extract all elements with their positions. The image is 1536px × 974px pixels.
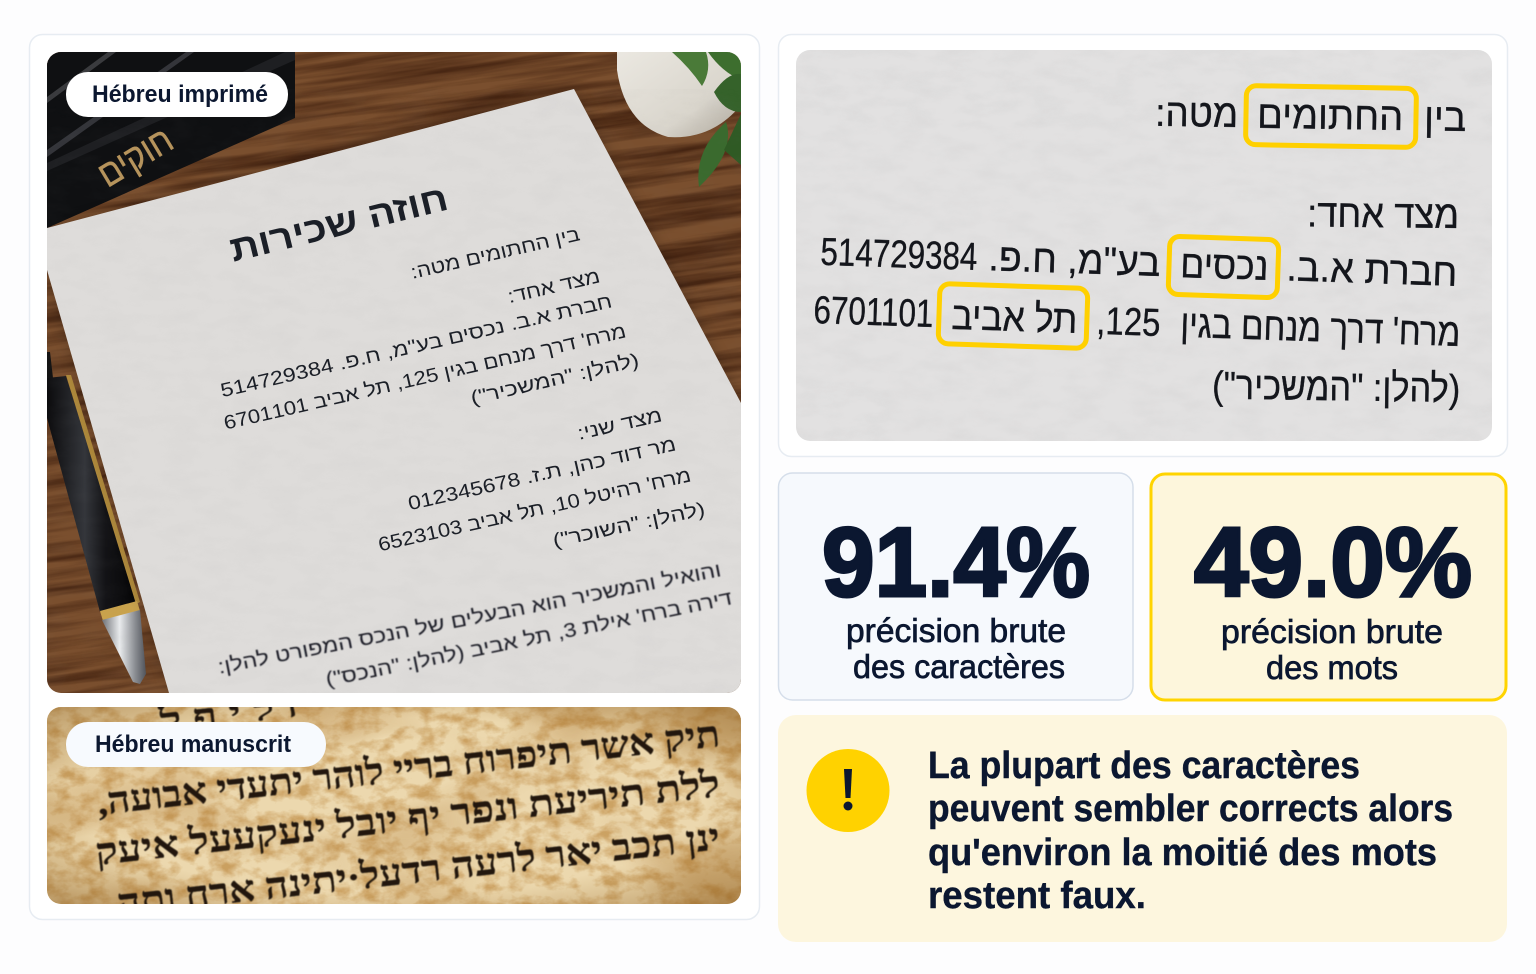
close-up Hebrew text lines [813, 92, 1467, 411]
contract text lines: (להלן: "השוכר") [551, 498, 707, 552]
label: Hébreu manuscrit: Hébreu manuscrit [95, 731, 291, 758]
close-up Hebrew text lines: 6701101 [813, 289, 934, 336]
label: Hébreu imprimé [66, 72, 288, 117]
contract text lines: מרח' רהיטל 10, תל אביב 6523103 [376, 464, 693, 556]
close-up Hebrew text lines: החתומים [1257, 94, 1404, 139]
callout text: La plupart des caractères [928, 745, 1360, 787]
manuscript text lines: תיק אשר תיפרוח בריי לוהר יתעדי אבועה, [95, 714, 722, 824]
photo: handwritten Hebrew on parchment [47, 707, 741, 904]
metric caption: des caractères [853, 648, 1065, 685]
callout text [928, 745, 1453, 917]
contract text lines: בין החתומים מטה: [409, 223, 582, 284]
icon: law book: חוקים [90, 119, 180, 195]
contract text lines [216, 177, 734, 691]
close-up Hebrew text lines: (להלן: "המשכיר") [1212, 365, 1460, 411]
contract text lines: דירה ברח' אילת 3, תל אביב (להלן: "הנכס") [324, 587, 734, 691]
contract text lines: מרח' דרך מנחם בגין 125, תל אביב 6701101 [222, 320, 628, 435]
highlight: word box 3 [938, 284, 1088, 348]
close-up Hebrew text lines: 514729384 [820, 231, 978, 279]
label: Hébreu imprimé: Hébreu imprimé [92, 81, 268, 108]
icon: warning exclamation [806, 749, 890, 832]
contract text lines: מצד אחד: [506, 265, 602, 308]
callout text: qu'environ la moitié des mots [928, 832, 1437, 874]
icon: ballpoint pen [47, 352, 146, 684]
icon: white cup and plant [617, 52, 741, 187]
close-up Hebrew text lines: מצד אחד: [1307, 192, 1459, 237]
contract text lines: מר דוד כהן, ת.ז. 012345678 [406, 433, 678, 515]
metric caption: précision brute [1221, 613, 1443, 650]
metric caption [1221, 613, 1443, 686]
highlight: word box 1 [1245, 86, 1416, 147]
close-up Hebrew text lines: חברת א.ב. [1286, 246, 1458, 295]
contract text lines: והואיל והמשכיר הוא הבעלים של הנכס המפורט להלן: [216, 559, 723, 679]
card: word accuracy [1151, 474, 1506, 700]
metric caption: des mots [1266, 649, 1398, 686]
contract text lines: חברת א.ב. נכסים בע"מ, ח.פ. 514729384 [218, 290, 614, 402]
label: Hébreu manuscrit [66, 722, 326, 767]
card: character accuracy [778, 473, 1133, 700]
close-up Hebrew text lines: מרח' דרך מנחם בגין [1180, 303, 1461, 355]
manuscript text lines: ינן תכב יאר לרעה רדעל·יתינה ארח ותה [115, 817, 722, 924]
callout text: peuvent sembler corrects alors [928, 788, 1453, 830]
contract text lines: מצד שני: [575, 404, 664, 445]
photo: zoomed paper with Hebrew text [796, 50, 1492, 441]
panel: OCR close-up [778, 34, 1508, 456]
manuscript text lines: ללת תיריעת ונפר יף יובל ינעקעעל איעק [93, 764, 722, 874]
photo: printed Hebrew contract on wooden desk [47, 52, 741, 693]
close-up Hebrew text lines: בין [1424, 96, 1467, 140]
metric: 49.0%: 49.0% [1194, 507, 1472, 617]
close-up Hebrew text lines: 125, [1096, 300, 1161, 345]
panel: examples of Hebrew documents [30, 34, 760, 920]
contract text lines: (להלן: "המשכיר") [469, 349, 641, 410]
close-up Hebrew text lines: מטה: [1155, 92, 1239, 136]
manuscript text lines: ז ל י ף ל [156, 687, 301, 738]
printed contract sheet [47, 89, 741, 693]
manuscript text lines [96, 707, 718, 904]
close-up Hebrew text lines: נכסים [1180, 243, 1269, 289]
contract text lines: חוזה שכירות [226, 177, 452, 270]
close-up Hebrew text lines: בע"מ, ח.פ. [988, 236, 1161, 285]
metric: 91.4%: 91.4% [822, 507, 1090, 617]
highlight: word box 2 [1168, 236, 1279, 298]
callout: warning takeaway [778, 715, 1507, 942]
icon: law book [47, 52, 295, 228]
close-up Hebrew text lines: תל אביב [951, 295, 1078, 342]
metric caption: précision brute [846, 612, 1066, 649]
metric caption [846, 612, 1066, 685]
callout text: restent faux. [928, 875, 1146, 917]
